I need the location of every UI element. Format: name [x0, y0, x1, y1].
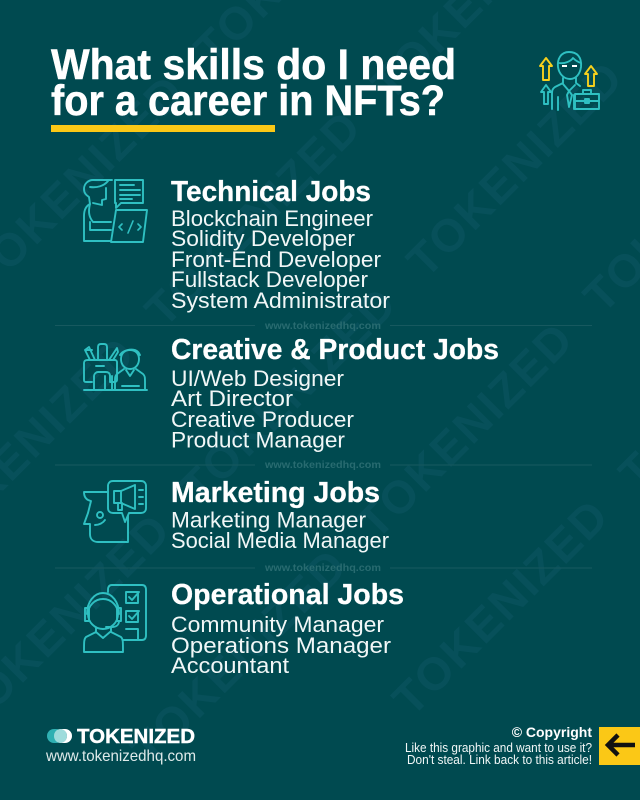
icon: yellow box with back arrow: [599, 727, 640, 765]
panel: technical jobs: [84, 176, 391, 313]
job list: UI/Web Designer: [171, 366, 345, 391]
job list: [171, 612, 392, 678]
copyright note: Like this graphic and want to use it?: [405, 740, 592, 755]
panel: marketing jobs: [84, 477, 389, 553]
job list: Community Manager: [171, 612, 385, 637]
title: [51, 41, 456, 125]
text: TOKENIZED: [396, 50, 633, 287]
icon: businessman with arrows: [540, 52, 599, 110]
panel: creative and product jobs: [84, 334, 499, 452]
heading: Marketing Jobs: [171, 477, 380, 509]
job list: Social Media Manager: [171, 528, 389, 553]
job list: Marketing Manager: [171, 508, 367, 532]
job list: Accountant: [171, 653, 290, 678]
job list: Front-End Developer: [171, 247, 382, 272]
title: What skills do I need: [51, 41, 456, 89]
job list: [171, 508, 389, 553]
job list: Solidity Developer: [171, 226, 356, 251]
job list: [171, 206, 391, 313]
divider with url: www.tokenizedhq.com: [264, 321, 381, 332]
footer logo: www.tokenizedhq.com: [45, 748, 196, 765]
job list: System Administrator: [171, 288, 391, 313]
panel: operational jobs: [84, 579, 404, 678]
job list: Blockchain Engineer: [171, 206, 373, 231]
text: TOKENIZED: [135, 100, 372, 336]
icon: support agent with checklist: [84, 585, 146, 652]
text: TOKENIZED: [170, 276, 407, 513]
icon: head with megaphone: [84, 481, 146, 542]
copyright note: [405, 724, 592, 767]
icon: designer at desk: [84, 344, 147, 390]
text: TOKENIZED: [347, 312, 584, 548]
text: TOKENIZED: [121, 538, 357, 775]
job list: Fullstack Developer: [171, 267, 369, 292]
copyright note: © Copyright: [512, 724, 592, 740]
divider with url: www.tokenizedhq.com: [264, 460, 381, 471]
text: TOKENIZED: [382, 488, 619, 725]
copyright note: Don't steal. Link back to this article!: [407, 752, 592, 767]
heading: Creative & Product Jobs: [171, 334, 499, 366]
title underline: [51, 125, 275, 132]
footer logo: [45, 726, 196, 765]
job list: Operations Manager: [171, 633, 392, 658]
title: for a career in NFTs?: [51, 77, 445, 125]
heading: Operational Jobs: [171, 579, 404, 611]
icon: developer with laptop: [84, 180, 147, 242]
job list: Product Manager: [171, 428, 345, 452]
job list: [171, 366, 354, 452]
divider with url: www.tokenizedhq.com: [264, 563, 381, 574]
icon: logo pill: [47, 729, 72, 743]
job list: Creative Producer: [171, 407, 354, 432]
heading: Technical Jobs: [171, 176, 371, 208]
footer logo: TOKENIZED: [77, 726, 195, 748]
job list: Art Director: [171, 386, 294, 411]
